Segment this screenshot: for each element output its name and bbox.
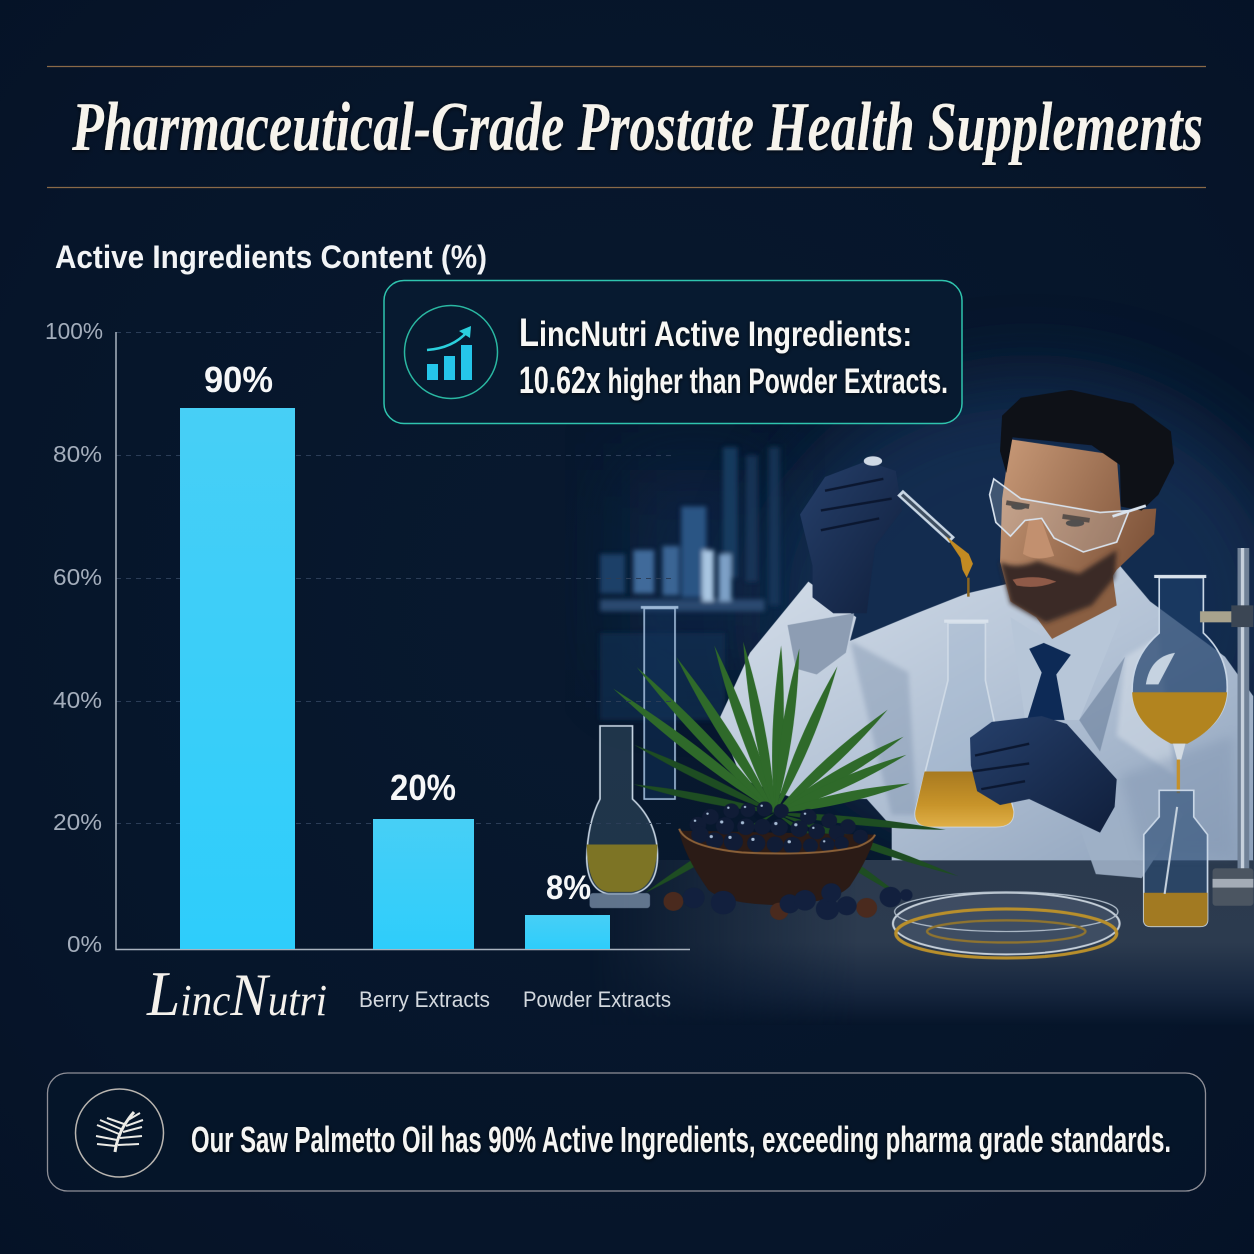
lab coat [719, 562, 1253, 878]
petri dish [893, 892, 1120, 958]
left flask with oil [587, 726, 658, 908]
head and face [1000, 439, 1156, 639]
callout text: 10.62x higher than Powder Extracts. [519, 360, 948, 402]
callout text [519, 311, 948, 402]
bar: Berry Extracts 20% [373, 767, 474, 949]
y axis labels: 0% [67, 931, 102, 957]
category label: Powder Extracts: Powder Extracts [523, 987, 671, 1012]
raised gloved hand with pipette [800, 456, 973, 613]
graduated cylinder [641, 607, 678, 799]
bar: Powder Extracts 8%: 8% [546, 869, 591, 907]
loose berries on table [663, 883, 913, 920]
saw palmetto leaves [610, 641, 960, 902]
y axis labels: 20% [53, 809, 102, 835]
lab background glow [630, 380, 1254, 840]
safety glasses [990, 479, 1146, 552]
receiving bottle [1144, 790, 1208, 926]
chart heading: Active Ingredients Content (%) [55, 239, 487, 275]
chart grid and axes [116, 332, 690, 950]
category label: LincNutri logo: LincNutri [146, 958, 327, 1029]
retort stand and clamp [1200, 548, 1253, 906]
callout text: LincNutri Active Ingredients: [519, 311, 912, 355]
callout: active ingredients comparison [384, 280, 962, 424]
bar chart [45, 318, 690, 1029]
holding gloved hand [970, 716, 1117, 833]
y axis labels: 60% [53, 564, 102, 590]
bar: Berry Extracts 20%: 20% [390, 767, 456, 808]
category label: Berry Extracts: Berry Extracts [359, 987, 490, 1012]
bottom banner [48, 1073, 1206, 1191]
hair [1000, 390, 1174, 510]
Erlenmeyer flask with oil [915, 621, 1013, 827]
shirt collar and tie [1010, 586, 1121, 720]
bar: Powder Extracts 8% [525, 869, 610, 949]
bar: LincNutri 90% [180, 359, 295, 949]
table top [654, 860, 1254, 1014]
round-bottom separator flask [1132, 576, 1227, 793]
y axis labels: 100% [45, 318, 103, 344]
y axis labels [45, 318, 103, 957]
y axis labels: 80% [53, 441, 102, 467]
y axis labels: 40% [53, 687, 102, 713]
blurred shelf glassware [600, 447, 780, 720]
icon: rising bar chart [404, 306, 498, 398]
bar: LincNutri 90%: 90% [204, 359, 273, 400]
photo: scientist in laboratory with saw palmetto [587, 380, 1254, 1025]
bowl of saw palmetto berries [679, 801, 875, 905]
icon: palm frond [76, 1089, 164, 1177]
